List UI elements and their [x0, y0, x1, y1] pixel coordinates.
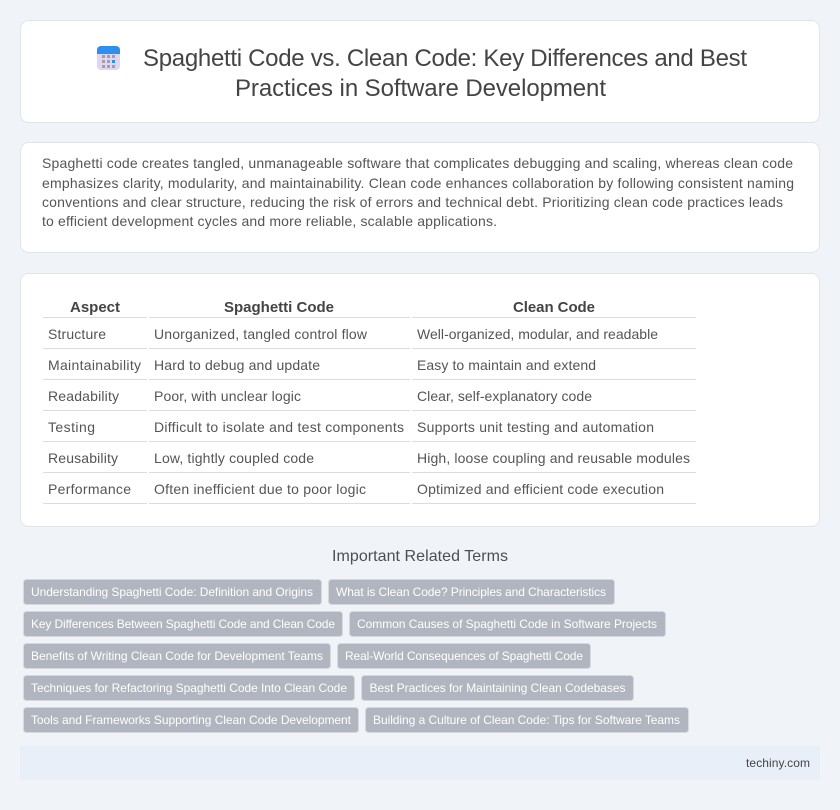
row: Maintainability: Easy to maintain and extend [417, 357, 596, 373]
tag [24, 644, 330, 668]
panel: introduction text [20, 142, 820, 252]
tag: Real-World Consequences of Spaghetti Code [345, 649, 583, 663]
table header row: Aspect [70, 299, 120, 316]
row: Reusability: Reusability [48, 450, 118, 466]
row: Reusability: High, loose coupling and reusable modules [417, 450, 690, 466]
tag: Tools and Frameworks Supporting Clean Code Development [31, 713, 352, 727]
tag: Best Practices for Maintaining Clean Codebases [370, 681, 626, 695]
row: Readability: Poor, with unclear logic [154, 388, 301, 404]
tag: What is Clean Code? Principles and Characteristics [336, 585, 606, 599]
tag [366, 708, 688, 732]
panel: header [20, 20, 820, 122]
row: Testing [48, 419, 654, 435]
title: Spaghetti Code vs. Clean Code: Key Differences and Best [143, 45, 747, 72]
row: Testing: Difficult to isolate and test components [154, 419, 404, 435]
row: Performance: Often inefficient due to poor logic [154, 481, 366, 497]
tag: Common Causes of Spaghetti Code in Software Projects [357, 617, 657, 631]
title [143, 45, 747, 102]
text block: summary: to efficient development cycles and more reliable, scalable applications. [42, 213, 497, 229]
row: Structure [48, 326, 658, 342]
tag [350, 612, 666, 636]
row: Maintainability: Maintainability [48, 357, 141, 373]
tag: Key Differences Between Spaghetti Code and Clean Code [31, 617, 335, 631]
title: Practices in Software Development [235, 75, 606, 102]
heading: Important Related Terms: Important Related Terms [332, 548, 508, 565]
row: Readability: Readability [48, 388, 119, 404]
tag: Techniques for Refactoring Spaghetti Code Into Clean Code [31, 681, 347, 695]
text block: summary: conventions and clear structure, reducing the risk of errors and technical debt. Prioritizing clean code practices leads [42, 194, 783, 210]
tag: Benefits of Writing Clean Code for Development Teams [31, 649, 323, 663]
row: Reusability [48, 450, 690, 466]
table header row: Clean Code [513, 299, 595, 316]
row: Structure: Structure [48, 326, 106, 342]
row: Readability: Clear, self-explanatory code [417, 388, 592, 404]
tag: Building a Culture of Clean Code: Tips for Software Teams [373, 713, 680, 727]
source text: techiny.com [746, 756, 810, 770]
tag [328, 580, 614, 604]
tag [338, 644, 590, 668]
tag [362, 676, 634, 700]
text block: summary: Spaghetti code creates tangled, unmanageable software that complicates debugging and scaling, whereas clean code [42, 155, 793, 171]
row: Performance [48, 481, 664, 497]
table header row: Spaghetti Code [224, 299, 334, 316]
table header row [70, 299, 595, 316]
row: Maintainability: Hard to debug and update [154, 357, 320, 373]
row: Performance: Performance [48, 481, 131, 497]
tag [24, 612, 342, 636]
row: Testing: Supports unit testing and automation [417, 419, 654, 435]
text block: summary [42, 155, 794, 229]
row: Readability [48, 388, 592, 404]
row: Structure: Unorganized, tangled control flow [154, 326, 368, 342]
related term tags [24, 580, 688, 732]
row: Performance: Optimized and efficient code execution [417, 481, 664, 497]
tag: Understanding Spaghetti Code: Definition and Origins [31, 585, 313, 599]
panel: comparison table [20, 274, 820, 526]
icon: calendar grid [97, 46, 120, 70]
tag [24, 580, 322, 604]
row: Structure: Well-organized, modular, and readable [417, 326, 658, 342]
tag [24, 708, 358, 732]
row: Reusability: Low, tightly coupled code [154, 450, 314, 466]
row: Testing: Testing [48, 419, 95, 435]
footer: source [20, 746, 820, 780]
tag [24, 676, 354, 700]
row: Maintainability [48, 357, 596, 373]
text block: summary: emphasizes clarity, modularity, and maintainability. Clean code enhances collaboration by following consistent naming [42, 175, 794, 191]
